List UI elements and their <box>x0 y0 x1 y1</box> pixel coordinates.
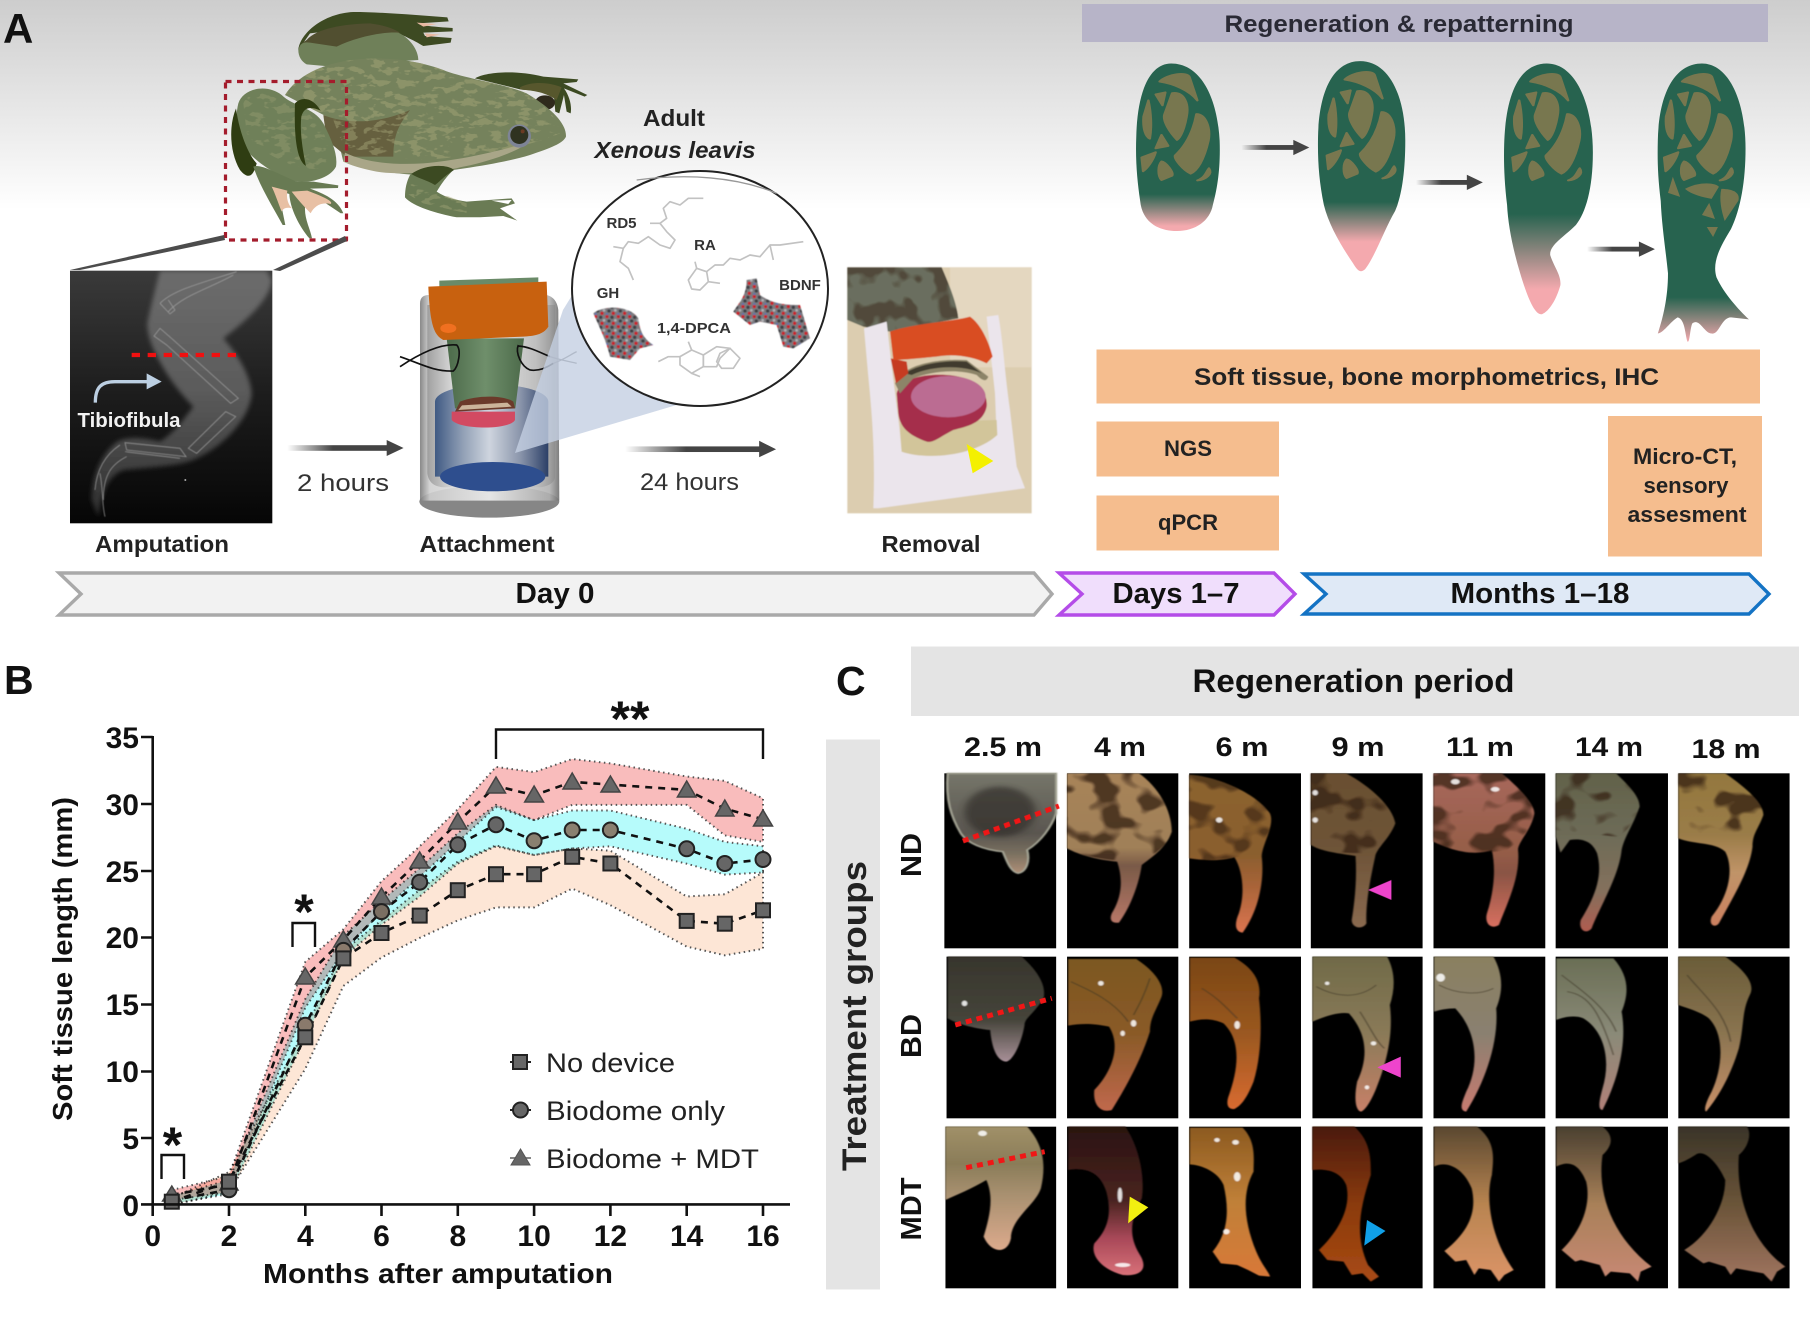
panel letter A: A <box>3 5 33 52</box>
row label: MDT: MDT <box>896 1177 928 1240</box>
series lines <box>172 782 763 1202</box>
assay box: qPCR: qPCR <box>1158 510 1218 535</box>
arrow: attachment to removal <box>625 441 776 457</box>
x-ray photo: amputation site: Tibiofibula <box>78 410 181 432</box>
y axis tick labels: 35 <box>106 722 139 755</box>
x axis tick labels: 0 <box>144 1220 161 1253</box>
markers: biodome only circles <box>222 817 770 1197</box>
callout circle: drug cocktail molecules: BDNF <box>779 277 821 294</box>
zoom connector lines <box>70 235 347 271</box>
x axis tick labels: 10 <box>517 1220 551 1253</box>
assay box: soft tissue, bone morphometrics, IHC: Soft tissue, bone morphometrics, IHC <box>1194 364 1659 391</box>
significance bracket: months 9–16 <box>496 691 763 759</box>
row label: BD: BD <box>896 1014 928 1058</box>
heading: Adult Xenous leavis: Xenous leavis <box>592 137 756 163</box>
banner: Regeneration & repatterning <box>1082 4 1768 42</box>
label: 24 hours: 24 hours <box>640 469 739 496</box>
illustration: biodome device <box>400 250 680 518</box>
column labels: time points: 6 m <box>1216 732 1268 762</box>
markers: no device squares <box>165 850 770 1209</box>
red amputation line: BD <box>955 998 1052 1025</box>
side bar: Treatment groups <box>826 740 880 1290</box>
assay box: Micro-CT, sensory assesment: sensory <box>1644 473 1729 498</box>
column labels: time points: 14 m <box>1575 732 1643 762</box>
x axis tick labels: 8 <box>449 1220 466 1253</box>
assay box: NGS <box>1096 422 1279 476</box>
arrow 3 <box>1587 241 1655 257</box>
callout circle: drug cocktail molecules: RA <box>694 237 716 254</box>
timeline arrow: Day 0 <box>59 573 1052 615</box>
panel C: regeneration photo grid <box>826 646 1799 1290</box>
banner: Regeneration & repatterning: Regeneration & repatterning <box>1224 11 1574 38</box>
arrow 1 <box>1241 140 1309 155</box>
arrow 2 <box>1416 175 1483 190</box>
y axis tick labels: 0 <box>122 1190 139 1223</box>
assay box: NGS: NGS <box>1164 436 1212 461</box>
assay box: Micro-CT, sensory assesment: Micro-CT, <box>1633 444 1737 469</box>
assay box: soft tissue, bone morphometrics, IHC <box>1096 350 1760 404</box>
red amputation line: MDT <box>966 1152 1045 1168</box>
illustration: adult frog with amputation box <box>231 12 587 238</box>
column labels: time points: 9 m <box>1332 732 1384 762</box>
significance bracket: month 4: * <box>294 884 314 940</box>
legend: no device: No device <box>546 1048 675 1078</box>
callout circle: drug cocktail molecules: 1,4-DPCA <box>657 320 731 337</box>
arrowhead: yellow MDT 4 m <box>1128 1197 1148 1223</box>
caption: Removal: Removal <box>882 531 980 557</box>
band: no device <box>172 845 763 1205</box>
x axis title: Months after amputation <box>263 1258 613 1289</box>
stage 4 limb <box>1658 63 1749 342</box>
assay box: qPCR <box>1096 496 1279 550</box>
header bar: Regeneration period <box>911 646 1799 716</box>
label: 2 hours: 2 hours <box>297 470 389 497</box>
stage 3 limb <box>1504 63 1593 314</box>
top background gradient <box>0 0 1810 210</box>
callout circle: drug cocktail molecules: RD5 <box>606 215 637 232</box>
column labels: time points: 2.5 m <box>964 732 1042 762</box>
x axis tick labels: 14 <box>670 1220 704 1253</box>
band: biodome only <box>172 805 763 1204</box>
stage 2 limb <box>1318 61 1405 271</box>
y axis tick labels: 15 <box>106 989 139 1022</box>
timeline arrow: Months 1–18 <box>1304 574 1769 614</box>
column labels: time points: 11 m <box>1446 732 1514 762</box>
significance bracket: months 9–16: ** <box>611 691 650 747</box>
x axis tick labels: 6 <box>373 1220 390 1253</box>
x-ray photo: amputation site <box>70 271 272 523</box>
timeline arrow: Day 0: Day 0 <box>516 578 594 610</box>
column labels: time points <box>964 732 1760 764</box>
y axis tick labels: 20 <box>106 922 139 955</box>
heading: Adult Xenous leavis <box>592 105 756 163</box>
axes and ticks <box>141 736 790 1216</box>
legend: biodome + MDT: Biodome + MDT <box>546 1144 759 1174</box>
header bar: Regeneration period: Regeneration period <box>1192 663 1514 699</box>
arrowhead: magenta ND 9 m <box>1368 880 1392 900</box>
band: biodome + MDT <box>172 759 763 1200</box>
panel letter C: C <box>836 658 866 704</box>
photo: device removal <box>847 267 1032 513</box>
shaded confidence bands <box>172 759 763 1205</box>
arrowhead: blue MDT 9 m <box>1364 1220 1386 1246</box>
y axis tick labels: 5 <box>122 1123 139 1156</box>
row MDT photographs <box>945 1127 1790 1288</box>
callout circle: drug cocktail molecules <box>572 171 828 406</box>
row label: ND: ND <box>896 833 928 877</box>
timeline arrow: Days 1–7 <box>1059 573 1295 615</box>
side bar: Treatment groups: Treatment groups <box>836 861 874 1171</box>
timeline arrow: Days 1–7: Days 1–7 <box>1112 578 1240 610</box>
markers: biodome + MDT triangles <box>163 773 773 1201</box>
red amputation line: ND <box>963 806 1059 841</box>
photo grid: limb photographs <box>944 773 1790 1288</box>
panel letter B: B <box>4 657 34 703</box>
arrowhead: magenta BD 9 m <box>1377 1057 1401 1078</box>
panel A: experimental workflow <box>3 4 1769 615</box>
caption: Attachment: Attachment <box>420 531 555 557</box>
row ND photographs <box>944 773 1790 948</box>
regeneration stages: limb illustrations <box>1136 61 1749 342</box>
y axis title: Soft tissue length (mm) <box>47 797 78 1121</box>
y axis tick labels <box>106 722 139 1223</box>
row BD photographs <box>947 957 1790 1118</box>
callout circle: drug cocktail molecules: GH <box>597 285 619 302</box>
arrow: amputation to attachment <box>287 440 404 456</box>
red dashed selection box <box>226 82 346 240</box>
y axis tick labels: 10 <box>106 1056 139 1089</box>
assay box: Micro-CT, sensory assesment <box>1608 416 1762 556</box>
legend: biodome only: Biodome only <box>546 1096 726 1126</box>
y axis tick labels: 25 <box>106 856 139 889</box>
y axis tick labels: 30 <box>106 789 139 822</box>
significance bracket: month 0.5: * <box>163 1117 183 1173</box>
x axis tick labels: 16 <box>746 1220 780 1253</box>
x axis tick labels: 2 <box>221 1220 237 1253</box>
caption: Amputation: Amputation <box>95 531 229 557</box>
assay box: Micro-CT, sensory assesment: assesment <box>1628 502 1747 527</box>
timeline arrow: Months 1–18: Months 1–18 <box>1450 578 1630 610</box>
panel B: soft tissue length chart <box>4 657 790 1289</box>
stage 1 limb <box>1136 63 1220 231</box>
column labels: time points: 18 m <box>1692 734 1760 764</box>
x axis tick labels: 4 <box>297 1220 314 1253</box>
heading: Adult Xenous leavis: Adult <box>643 105 705 131</box>
x axis tick labels <box>144 1220 780 1253</box>
legend <box>510 1048 759 1174</box>
column labels: time points: 4 m <box>1094 732 1146 762</box>
x axis tick labels: 12 <box>594 1220 627 1253</box>
